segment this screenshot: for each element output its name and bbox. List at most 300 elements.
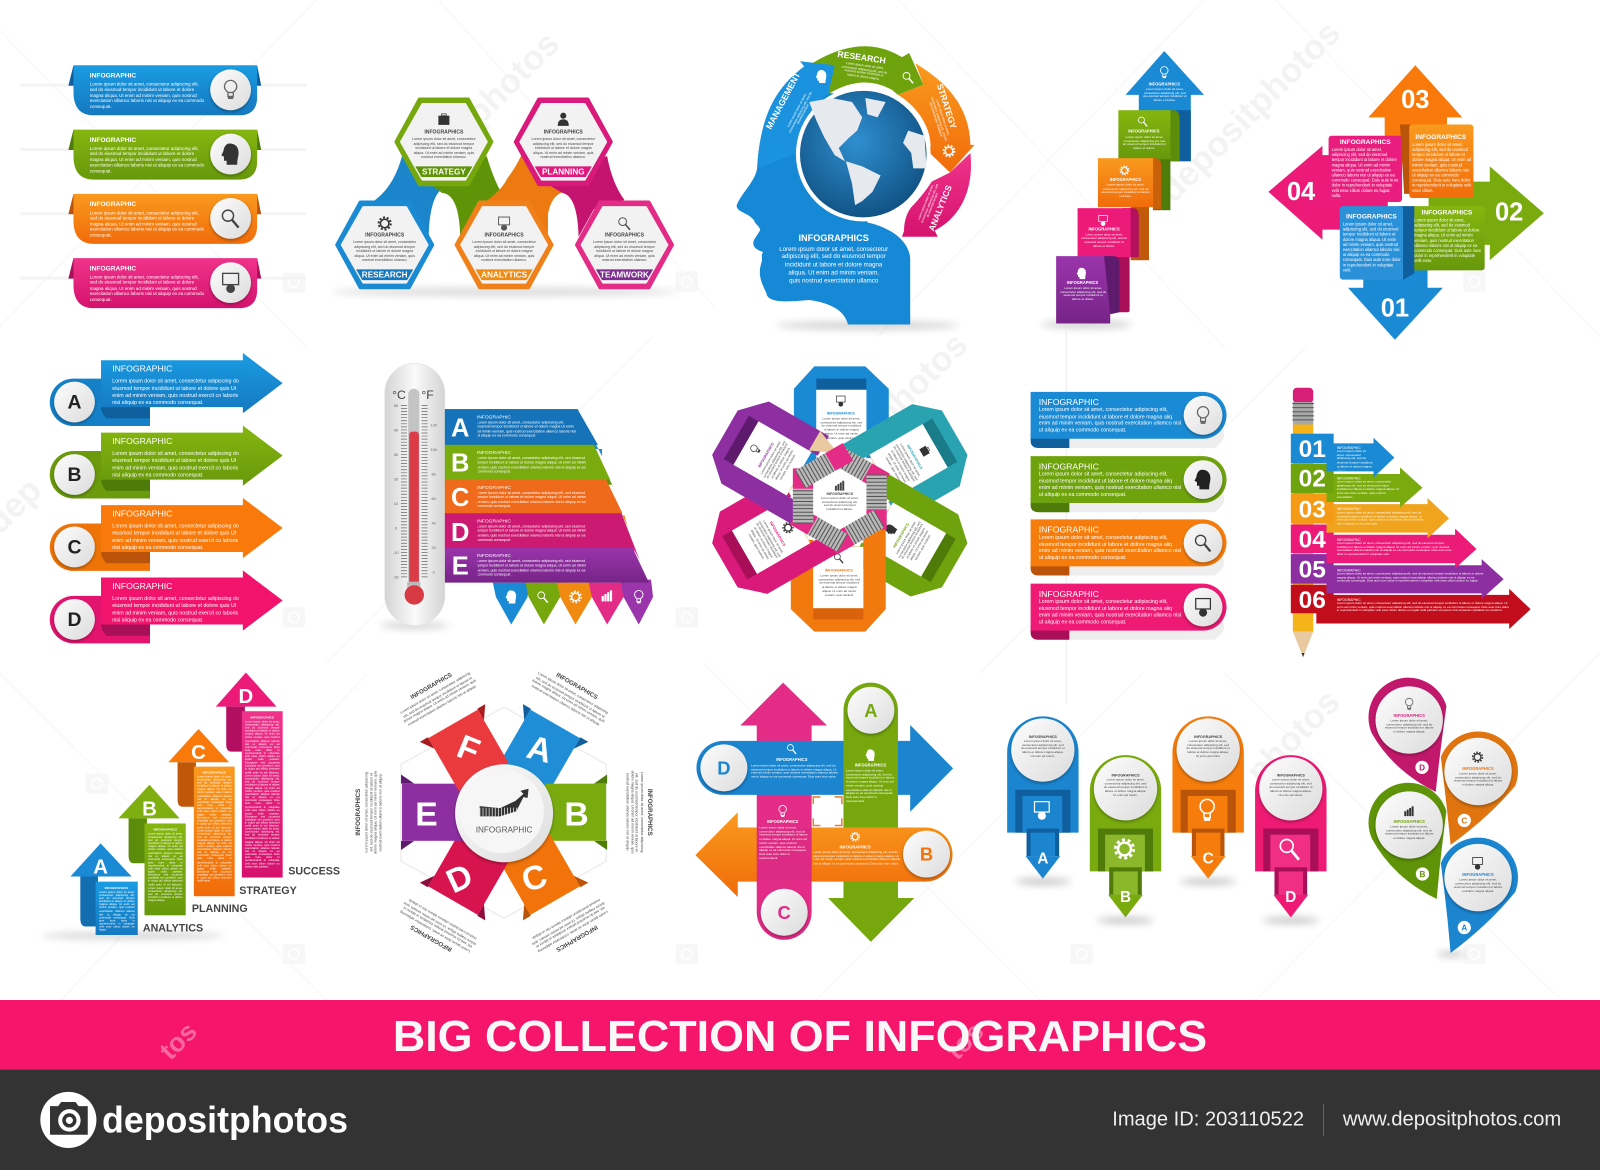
drop C (1441, 731, 1518, 845)
outer text: A: Lorem ipsum dolor sit amet, consectetur adipiscing elit, sed do eiusmod tempor incididunt ut labore et dolore magna aliqua. Ut enim ad minim veniam, quis nostrud exercitation ullamco laboris nisi ut aliquip. (531, 671, 609, 727)
column B: INFOGRAPHICS (154, 828, 177, 832)
arrow 04 (1268, 146, 1388, 240)
banner: orange (20, 194, 306, 244)
watermark layer: photos (1239, 683, 1348, 791)
arrow 02: 02 (1495, 198, 1523, 226)
petal: teal (835, 393, 979, 531)
arrow 01: INFOGRAPHIC (1337, 446, 1361, 450)
card: blue: Lorem ipsum dolor sit amet, adipiscing elit, sed do eiusmod tempor incididunt ut labore et dolore magna aliqua. Ut enim ad minim veniam, quis nostrud exercitation ullamco laboris nisi ut aliquip ex ea commodo consequat. Duis aute irure dolor in reprehenderit in voluptate velit. (1343, 221, 1401, 272)
arrow 01: 01 (1381, 294, 1409, 322)
petal: green: INFOGRAPHICS (892, 522, 910, 549)
ribbon C: Lorem ipsum dolor sit amet, consectetur adipiscing elit, sed eiusmod tempor incididunt ut labore et dolore magna aliqua. Ut enim ad minim veniam, quis nostrud exercitation ullamco laboris nisi ut aliquip ex ea commodo consequat. (477, 490, 586, 508)
drop C: C (1461, 816, 1467, 825)
centre hexagon (813, 468, 866, 530)
banner: blue: Lorem ipsum dolor sit amet, consectetur adipiscing elit, sed do eiusmod tempor incididunt ut labore et dolore magna aliqua. Ut enim ad minim veniam, quis nostrud exercitation ullamco laboris nisi ut aliquip ex ea commodo consequat. (90, 81, 204, 109)
column C: C (191, 742, 206, 764)
banner: orange: Lorem ipsum dolor sit amet, consectetur adipiscing elit, sed do eiusmod tempor incididunt ut labore et dolore magna aliqua. Ut enim ad minim veniam, quis nostrud exercitation ullamco laboris nisi ut aliquip ex ea commodo consequat. (90, 210, 204, 238)
arrow D: D (67, 609, 81, 631)
thermometer: -20 (393, 575, 399, 580)
banner: blue: INFOGRAPHIC (90, 73, 136, 80)
arrow D: INFOGRAPHIC (112, 581, 172, 591)
drop B (1368, 783, 1446, 899)
centre hexagon: INFOGRAPHICS (827, 492, 854, 496)
ribbon B: INFOGRAPHIC (477, 450, 511, 456)
label: blue (1031, 392, 1227, 448)
hexagon: teamwork: TEAMWORK (600, 271, 649, 280)
centre disc: INFOGRAPHIC (476, 826, 533, 835)
thermometer: 80 (432, 472, 436, 477)
outer text: C (522, 885, 616, 963)
scroll: orange (1098, 158, 1161, 260)
drop B: B (1420, 870, 1426, 879)
step labels: SUCCESS (288, 865, 340, 877)
thermometer: 40 (394, 428, 398, 433)
thermometer: 30 (394, 452, 398, 457)
arrow: management: MANAGEMENT (764, 70, 803, 131)
ribbon A: Lorem ipsum dolor sit amet, consectetur adipiscing elit, eiusmod tempor incididunt ut labore et dolore magna Ut enim ad minim veniam, quis nostrud exercitation ullamco laboris nisi ut aliquip ex ea commodo consequat. (477, 420, 576, 438)
petal: green: Lorem ipsum dolor sit amet, consectetur adipiscing elit, sed do eiusmod tempor incididunt ut labore et dolore magna aliqua. Ut enim ad minim veniam, quis nostrud. (895, 520, 931, 561)
arrow: strategy: STRATEGY (935, 83, 959, 130)
hexagon: teamwork: Lorem ipsum dolor sit amet, consectetur adipiscing elit, sed do eiusmod tempor incididunt ut labore et dolore magna aliqua. Ut enim ad minim veniam, quis nostrud exercitation ullamco. (593, 240, 656, 263)
title band (0, 1000, 1600, 1069)
pencil (1293, 388, 1313, 657)
column D: Lorem ipsum dolor sit amet, consectetur adipiscing elit, sed do eiusmod tempor incididunt ut labore et dolore magna aliqua. Ut enim ad minim veniam, quis nostrud exercitation ullamco laboris nisi ut aliquip ex ea commodo consequat. Duis aute irure dolor in reprehenderit in voluptate velit esse cillum dolore eu fugiat nulla pariatur. Excepteur sint occaecat cupidatat non proident, sunt in culpa qui officia deserunt mollit anim id est laborum. Lorem ipsum dolor sit amet, consectetur adipiscing elit, sed do eiusmod tempor incididunt ut labore et dolore magna aliqua. Ut enim ad minim veniam, quis nostrud exercitation ullamco laboris nisi ut aliquip ex ea commodo consequat. Duis aute irure dolor in reprehenderit in voluptate velit esse cillum dolore eu fugiat nulla pariatur. Excepteur sint occaecat cupidatat non proident, sunt in culpa qui officia deserunt mollit anim id est laborum. Lorem ipsum dolor sit amet, consectetur adipiscing elit, sed do eiusmod tempor incididunt ut labore et dolore magna aliqua. Ut enim ad minim veniam, quis nostrud exercitation ullamco laboris nisi ut aliquip ex ea commodo consequat. Duis aute irure dolor in reprehenderit in voluptate velit esse cillum dolore eu fugiat nulla pariatur. (245, 720, 280, 869)
panel: lettered arrows (50, 353, 283, 643)
hexagon: research: RESEARCH (362, 271, 408, 280)
pin C: INFOGRAPHICS (1194, 735, 1223, 739)
title band: tos (940, 1016, 990, 1065)
pin C: C (1203, 850, 1214, 867)
arrow: strategy (898, 63, 974, 172)
ribbon E: INFOGRAPHIC (477, 553, 511, 559)
ribbon A (445, 409, 602, 456)
panel: rounded labels (1031, 392, 1227, 640)
badge C: C (778, 902, 791, 923)
arrow: analytics (902, 153, 971, 237)
arrow 04 (1291, 524, 1477, 568)
badge B (903, 831, 950, 878)
arrow 04: INFOGRAPHIC (1337, 538, 1361, 542)
arrow 06: 06 (1299, 587, 1326, 614)
globe (796, 87, 931, 221)
arrow 02 (1291, 464, 1422, 508)
thermometer: °F (421, 388, 434, 402)
logo (40, 1092, 348, 1148)
website: www.depositphotos.com (1342, 1109, 1561, 1131)
arrow 01: 01 (1299, 436, 1326, 463)
ribbon D: INFOGRAPHIC (477, 518, 511, 524)
hexagon: analytics: Lorem ipsum dolor sit amet, consectetur adipiscing elit, sed do eiusmod tempor incididunt ut labore et dolore magna aliqua. Ut enim ad minim veniam, quis nostrud exercitation ullamco. (472, 240, 536, 263)
column B (118, 785, 186, 915)
badge C (761, 889, 808, 936)
hexagon: analytics: INFOGRAPHICS (485, 233, 524, 239)
pin B: B (1120, 889, 1131, 906)
step labels: PLANNING (192, 903, 248, 915)
centre corner marks (813, 797, 842, 826)
petal: pink: INFOGRAPHICS (769, 521, 786, 547)
thermometer: 40 (432, 520, 436, 525)
ribbon D: Lorem ipsum dolor sit amet, consectetur adipiscing elit, sed eiusmod tempor incididunt ut labore et dolore magna aliqua. Ut enim ad minim veniam, quis nostrud exercitation ullamco laboris nisi ut aliquip ex ea commodo consequat. (477, 524, 586, 542)
pins (493, 580, 653, 624)
outer text: F: INFOGRAPHICS (409, 672, 453, 701)
outer text: F: Lorem ipsum dolor sit amet, consectetur adipiscing elit, sed do eiusmod tempor incididunt ut labore et dolore magna aliqua. Ut enim ad minim veniam, quis nostrud exercitation ullamco laboris nisi ut aliquip. (399, 671, 477, 727)
column A: A (93, 856, 108, 878)
panel: scroll staircase arrow (1041, 51, 1204, 329)
ribbon letters: B (564, 797, 589, 834)
outer text: E (355, 769, 395, 855)
card: orange: INFOGRAPHICS (1415, 134, 1467, 141)
hexagon: research: INFOGRAPHICS (365, 233, 405, 239)
hexagon: research (337, 202, 433, 288)
column D: D (239, 686, 253, 708)
arrow: management (757, 61, 835, 168)
text green (846, 749, 896, 816)
arrow: blue top (1126, 51, 1204, 161)
column C (168, 729, 235, 896)
thermometer: 0 (395, 526, 397, 531)
arrow 02: INFOGRAPHIC (1337, 477, 1361, 481)
petal: purple: INFOGRAPHICS (757, 442, 775, 468)
text green: Lorem ipsum dolor sit amet, consectetur adipiscing elit, sed do eiusmod tempor incididunt ut labore et dolore magna aliqua. Ut enim ad minim veniam, quis nostrud exercitation ullamco laboris nisi ut aliquip ex ea commodo consequat. Duis aute irure dolor in reprehenderit. (846, 769, 894, 803)
thermometer: 100 (430, 447, 437, 452)
label: orange: Lorem ipsum dolor sit amet, consectetur adipiscing elit, eiusmod tempor incididunt ut labore et dolore magna aliq enim ad minim veniam, quis nostrud exercitation ullamco nisi ut aliquip ex ea commodo consequat. (1039, 535, 1181, 561)
arrow A green vertical (828, 683, 914, 942)
outer text: C: INFOGRAPHICS (555, 923, 599, 953)
arrow: analytics: ANALYTICS (926, 183, 954, 233)
thermometer: 50 (394, 403, 398, 408)
drop B: INFOGRAPHICS (1394, 819, 1425, 824)
outer text: B (613, 769, 653, 855)
ribbon B (545, 774, 607, 850)
hexagon: planning: Lorem ipsum dolor sit amet, consectetur adipiscing elit, sed do eiusmod tempor incididunt ut labore et dolore magna aliqua. Ut enim ad minim veniam, quis nostrud exercitation ullamco. (532, 137, 595, 160)
arrow: strategy: Lorem ipsum dolor sit amet, consectetur adipiscing elit, sed do eiusmod tempor incididunt. (928, 96, 951, 141)
ribbon D: D (451, 519, 469, 547)
text pink (759, 805, 809, 871)
head text: incididunt ut labore et dolore magna (785, 262, 882, 269)
panel: four directional arrows (1268, 65, 1544, 340)
head text: INFOGRAPHICS (799, 233, 869, 243)
petal: orange (791, 519, 886, 632)
card: pink: INFOGRAPHICS (1340, 139, 1391, 146)
outer text: E: INFOGRAPHICS (355, 789, 362, 836)
text green: INFOGRAPHICS (855, 762, 886, 767)
label: blue: Lorem ipsum dolor sit amet, consectetur adipiscing elit, eiusmod tempor incididunt ut labore et dolore magna aliq enim ad minim veniam, quis nostrud exercitation ullamco nisi ut aliquip ex ea commodo consequat. (1039, 407, 1181, 433)
outer text: E: Lorem ipsum dolor sit amet, consectetur adipiscing elit, sed do eiusmod tempor incididunt ut labore et dolore magna aliqua. Ut enim ad minim veniam, quis nostrud exercitation ullamco laboris nisi ut aliquip. (364, 771, 382, 854)
ribbon C: INFOGRAPHIC (477, 485, 511, 491)
label: pink: Lorem ipsum dolor sit amet, consectetur adipiscing elit, eiusmod tempor incididunt ut labore et dolore magna aliq enim ad minim veniam, quis nostrud exercitation ullamco nisi ut aliquip ex ea commodo consequat. (1039, 599, 1181, 625)
drop D (1368, 678, 1446, 792)
ribbon letters: C (517, 857, 552, 900)
outer text: D: Lorem ipsum dolor sit amet, consectetur adipiscing elit, sed do eiusmod tempor incididunt ut labore et dolore magna aliqua. Ut enim ad minim veniam, quis nostrud exercitation ullamco laboris nisi ut aliquip. (399, 898, 477, 953)
hexagon: analytics: ANALYTICS (481, 271, 528, 280)
step labels: ANALYTICS (143, 923, 203, 935)
ribbon C (445, 480, 628, 527)
arrow 03 (1291, 494, 1449, 538)
centre disc (455, 764, 553, 862)
arrow C pink vertical (740, 683, 827, 940)
ribbon E (401, 774, 463, 850)
outer text: A: INFOGRAPHICS (555, 672, 599, 701)
badge D: D (717, 757, 731, 778)
arrow 01 (1348, 245, 1443, 340)
ribbon letters: A (523, 729, 556, 771)
drop A: INFOGRAPHICS (1462, 872, 1494, 877)
panel: hexagonal ribbon wheel (355, 662, 653, 963)
column A: Lorem ipsum dolor sit amet, consectetur adipiscing elit, sed do eiusmod tempor incididunt ut labore et dolore magna aliqua. Ut enim ad minim veniam, quis nostrud exercitation ullamco laboris nisi ut aliquip ex ea commodo consequat. Duis aute irure dolor in reprehenderit in voluptate velit esse cillum dolore eu fugiat. (99, 891, 135, 932)
logo: depositphotos (102, 1100, 348, 1141)
outer text: C: Lorem ipsum dolor sit amet, consectetur adipiscing elit, sed do eiusmod tempor incididunt ut labore et dolore magna aliqua. Ut enim ad minim veniam, quis nostrud exercitation ullamco laboris nisi ut aliquip. (531, 898, 609, 953)
connectors between hexagons (370, 153, 624, 243)
drop A (1437, 838, 1518, 956)
drop D: D (1419, 763, 1425, 772)
badge D (700, 744, 747, 791)
column B: B (142, 798, 157, 820)
ribbon letters: D (441, 857, 479, 901)
column C: Lorem ipsum dolor sit amet, consectetur adipiscing elit, sed do eiusmod tempor incididunt ut labore et dolore magna aliqua. Ut enim ad minim veniam, quis nostrud exercitation ullamco laboris nisi ut aliquip ex ea commodo consequat. Duis aute irure dolor in reprehenderit in voluptate velit esse cillum dolore eu fugiat nulla pariatur. Excepteur sint occaecat cupidatat non proident, sunt in culpa qui officia deserunt mollit anim id est laborum. Lorem ipsum dolor sit amet, consectetur adipiscing elit, sed do eiusmod tempor incididunt ut labore et dolore magna aliqua. Ut enim ad minim veniam, quis nostrud exercitation ullamco laboris nisi ut aliquip ex ea commodo consequat. Duis aute irure dolor in reprehenderit in voluptate velit esse cillum dolore eu fugiat nulla pariatur. Excepteur sint occaecat cupidatat non proident, sunt in culpa qui officia deserunt mollit anim. (197, 776, 232, 883)
petal: purple: Lorem ipsum dolor sit amet, consectetur adipiscing elit, sed do eiusmod tempor incididunt ut labore et dolore magna aliqua. Ut enim ad minim veniam, quis nostrud. (760, 440, 796, 481)
thermometer: 20 (394, 477, 398, 482)
arrow A: INFOGRAPHIC (112, 363, 172, 373)
arrow C: C (67, 537, 81, 559)
arrow D (50, 570, 283, 643)
arrow C: INFOGRAPHIC (112, 508, 172, 518)
ribbon A: A (451, 415, 469, 443)
panel: head and globe (737, 46, 974, 330)
label: pink (1031, 584, 1227, 640)
ribbon E (445, 548, 649, 583)
petal: teal: Lorem ipsum dolor sit amet, consectetur adipiscing elit, sed do eiusmod tempor incididunt ut labore et dolore magna aliqua. Ut enim ad minim veniam, quis nostrud. (885, 443, 922, 483)
hexagon: planning (515, 99, 611, 185)
card: orange (1400, 124, 1473, 198)
ribbon letters: F (452, 728, 485, 770)
arrow 06 (1291, 585, 1531, 629)
card: pink (1329, 136, 1402, 202)
petal: blue: INFOGRAPHICS (827, 411, 855, 415)
arrow B: INFOGRAPHIC (112, 436, 172, 446)
arrow B: B (67, 464, 81, 486)
banner: pink (20, 258, 306, 308)
panel: stacked banners (20, 65, 306, 308)
column B: Lorem ipsum dolor sit amet, consectetur adipiscing elit, sed do eiusmod tempor incididunt ut labore et dolore magna aliqua. Ut enim ad minim veniam, quis nostrud exercitation ullamco laboris nisi ut aliquip ex ea commodo consequat. Duis aute irure dolor in reprehenderit in voluptate velit esse cillum dolore eu fugiat nulla pariatur. Excepteur sint occaecat cupidatat non proident, sunt in culpa qui officia deserunt mollit anim id est laborum. Lorem ipsum dolor sit amet, consectetur adipiscing elit, sed do eiusmod tempor incididunt ut labore et dolore magna aliqua. (148, 833, 183, 902)
petal: pink: Lorem ipsum dolor sit amet, consectetur adipiscing elit, sed do eiusmod tempor incididunt ut labore et dolore magna aliqua. Ut enim ad minim veniam, quis nostrud. (748, 519, 784, 560)
arrow A: Lorem ipsum dolor sit amet, consectetur adipiscing do eiusmod tempor incididunt ut labore et dolore quis Ut enim ad minim veniam, quis nostrud exercit co laboris nisi aliquip ex ea commodo consequat. (112, 379, 239, 406)
petal: green (833, 469, 978, 608)
column D (216, 672, 283, 878)
column A: INFOGRAPHICS (105, 886, 128, 890)
arrow 05: 05 (1299, 557, 1326, 584)
hexagon: strategy (396, 99, 492, 185)
pin B: INFOGRAPHICS (1111, 774, 1140, 778)
ribbon C: C (451, 484, 469, 512)
card: green: INFOGRAPHICS (1422, 209, 1473, 216)
pencil ferrule ring (790, 443, 890, 555)
arrow: analytics: Lorem ipsum dolor sit amet, consectetur adipiscing elit, sed do eiusmod tempor. (917, 183, 940, 224)
arrow: blue top: INFOGRAPHICS (1149, 82, 1180, 87)
arrow 03: 03 (1401, 86, 1429, 114)
outer text: B: Lorem ipsum dolor sit amet, consectetur adipiscing elit, sed do eiusmod tempor incididunt ut labore et dolore magna aliqua. Ut enim ad minim veniam, quis nostrud exercitation ullamco laboris nisi ut aliquip. (626, 771, 644, 854)
hexagon: teamwork (577, 202, 672, 288)
badge A (847, 687, 894, 734)
ribbon A (492, 704, 588, 796)
ribbon D (420, 829, 516, 920)
card: blue (1340, 206, 1414, 280)
label: green (1031, 456, 1227, 512)
ribbon C (492, 829, 588, 920)
arrow: management: Lorem ipsum dolor sit amet, consectetur adipiscing elit, sed do eiusmod tempor. (786, 91, 813, 133)
arrow A: A (67, 392, 81, 414)
hexagon: analytics (456, 202, 552, 288)
scroll: green: INFOGRAPHICS (1128, 129, 1160, 134)
card: green (1410, 206, 1485, 270)
ribbon E: E (452, 552, 469, 580)
drop A: A (1461, 924, 1467, 933)
ribbon E: Lorem ipsum dolor sit amet, consectetur adipiscing elit, sed eiusmod tempor incididunt ut labore et dolore magna aliqua. Ut enim ad minim veniam, quis nostrud exercitation ullamco laboris nisi ut aliquip ex ea commodo consequat. (477, 559, 586, 577)
watermark layer: depositphotos (1152, 14, 1348, 210)
hexagon: planning: PLANNING (542, 167, 585, 176)
card: orange: Lorem ipsum dolor sit amet, adipiscing elit, sed do eiusmod tempor incididunt ut labore et dolore magna aliqua. Ut enim ad minim veniam, quis nostrud exercitation ullamco laboris nisi ut aliquip ex ea commodo consequat. Duis aute irure dolor in reprehenderit in voluptate velit esse cillum. (1412, 142, 1471, 193)
text blue (751, 745, 841, 789)
pin D: D (1285, 889, 1296, 906)
text pink: Lorem ipsum dolor sit amet, consectetur adipiscing elit, sed do eiusmod tempor incididunt ut labore et dolore magna aliqua. Ut enim ad minim veniam, quis nostrud exercitation ullamco laboris nisi ut aliquip ex ea commodo consequat. Duis aute irure dolor in reprehenderit. (759, 827, 808, 860)
outer text: D (393, 885, 487, 963)
pin D (1255, 755, 1327, 923)
arrow C (50, 498, 283, 571)
label: orange (1031, 519, 1227, 576)
thermometer: °C (392, 388, 406, 402)
label: blue: INFOGRAPHIC (1039, 397, 1099, 407)
watermark layer: photos (867, 326, 975, 434)
arrow C: Lorem ipsum dolor sit amet, consectetur adipiscing do eiusmod tempor incididunt ut labore et dolore quis Ut enim ad minim veniam, quis nostrud exercit co laboris nisi aliquip ex ea commodo consequat. (112, 523, 239, 551)
arrow B orange horizontal (695, 812, 953, 897)
column A (70, 843, 138, 935)
card: blue: INFOGRAPHICS (1346, 213, 1397, 220)
card: green: Lorem ipsum dolor sit amet, adipiscing elit, sed do eiusmod tempor incididunt ut labore et dolore magna aliqua. Ut enim ad minim veniam, quis nostrud exercitation ullamco laboris nisi ut aliquip ex ea commodo consequat. Duis aute irure dolor in reprehenderit in voluptate velit esse. (1414, 217, 1481, 263)
head text: quis nostrud exercitation ullamco (789, 278, 878, 285)
banner: green: INFOGRAPHIC (90, 137, 136, 144)
thermometer: 0 (433, 569, 435, 574)
label: orange: INFOGRAPHIC (1039, 525, 1099, 535)
arrow: research: Lorem ipsum dolor sit amet, consectetur adipiscing elit, sed do eiusmod tempor incididunt ut labore et dolore magna. (841, 61, 887, 81)
drop C: INFOGRAPHICS (1462, 766, 1494, 771)
panel: hexagon chain (332, 99, 679, 296)
arrow 04: 04 (1287, 178, 1316, 206)
hexagon: strategy: STRATEGY (422, 167, 466, 176)
label: green: Lorem ipsum dolor sit amet, consectetur adipiscing elit, eiusmod tempor incididunt ut labore et dolore magna aliq enim ad minim veniam, quis nostrud exercitation ullamco nisi ut aliquip ex ea commodo consequat. (1039, 471, 1181, 497)
petal: pink (700, 467, 845, 605)
hexagon: teamwork: INFOGRAPHICS (605, 233, 645, 239)
ribbon B: B (451, 449, 469, 477)
ribbon B: Lorem ipsum dolor sit amet, consectetur adipiscing elit, sed eiusmod tempor incididunt ut labore et dolore magna aliqua. Ut enim ad minim veniam, quis nostrud exercitation ullamco laboris nisi ut aliquip ex ea commodo consequat. (477, 456, 586, 474)
arrow 04: 04 (1299, 526, 1326, 553)
pin A (1007, 716, 1079, 885)
panel: map-drop pins (1368, 678, 1518, 956)
arrow A (50, 353, 283, 426)
panel: stepped growth arrows (41, 672, 340, 939)
step labels (143, 865, 340, 935)
petal: teal: INFOGRAPHICS (906, 444, 924, 471)
banner: pink: INFOGRAPHIC (90, 265, 136, 272)
banner: orange: INFOGRAPHIC (90, 201, 136, 208)
petal: orange: INFOGRAPHICS (825, 568, 853, 572)
thermometer (385, 363, 445, 626)
watermark layer: photos (458, 25, 567, 133)
badge A: A (864, 700, 878, 721)
thermometer: 120 (430, 423, 437, 428)
card: pink: Lorem ipsum dolor sit amet, adipiscing elit, sed do eiusmod tempor incididunt ut labore et dolore magna aliqua. Ut enim ad minim veniam, quis nostrud exercitation ullamco laboris nisi ut aliquip ex ea commodo consequat. Duis aute irure dolor in reprehenderit in voluptate velit esse cillum dolore eu fugiat nulla. (1332, 147, 1398, 198)
head text: aliqua. Ut enim ad minim veniam, (788, 270, 879, 277)
banner: green (20, 130, 306, 180)
label: pink: INFOGRAPHIC (1039, 589, 1099, 599)
outer text: F (393, 662, 487, 739)
ribbon D (445, 513, 640, 560)
petal: purple (702, 390, 847, 529)
panel: pencil with numbered arrows (1291, 388, 1531, 657)
arrow B: Lorem ipsum dolor sit amet, consectetur adipiscing do eiusmod tempor incididunt ut labore et dolore quis Ut enim ad minim veniam, quis nostrud exercit co laboris nisi aliquip ex ea commodo consequat. (112, 451, 239, 479)
panel: pencil flower (700, 366, 979, 632)
panel: woven cross arrows (695, 683, 953, 942)
column C: INFOGRAPHICS (203, 770, 226, 774)
arrow: research (812, 46, 923, 95)
head silhouette (737, 66, 910, 324)
arrow B (50, 426, 283, 498)
arrow 06: INFOGRAPHIC (1337, 598, 1361, 602)
label: green: INFOGRAPHIC (1039, 461, 1099, 471)
pin B (1090, 755, 1161, 923)
arrow 02: 02 (1299, 466, 1326, 493)
arrow 05 (1291, 554, 1504, 599)
title band: BIG COLLECTION OF INFOGRAPHICS (393, 1012, 1207, 1061)
text blue: INFOGRAPHICS (776, 757, 808, 762)
banner: blue (20, 65, 306, 115)
ribbon letters: E (415, 797, 438, 834)
scroll: purple: INFOGRAPHICS (1067, 280, 1099, 285)
hexagon: strategy: INFOGRAPHICS (424, 130, 464, 136)
arrow: research: RESEARCH (837, 49, 886, 66)
ribbon letters (415, 728, 589, 901)
pin A: A (1037, 850, 1048, 867)
pin A: INFOGRAPHICS (1029, 735, 1057, 739)
pin C (1172, 716, 1244, 885)
thermometer: -10 (393, 550, 399, 555)
arrow D: Lorem ipsum dolor sit amet, consectetur adipiscing do eiusmod tempor incididunt ut labore et dolore quis Ut enim ad minim veniam, quis nostrud exercit co laboris nisi aliquip ex ea commodo consequat. (112, 596, 239, 623)
step labels: STRATEGY (239, 885, 297, 897)
banner: pink: Lorem ipsum dolor sit amet, consectetur adipiscing elit, sed do eiusmod tempor incididunt ut labore et dolore magna aliqua. Ut enim ad minim veniam, quis nostrud exercitation ullamco laboris nisi ut aliquip ex ea commodo consequat. (90, 274, 204, 302)
thermometer: 10 (394, 501, 398, 506)
arrow 03: 03 (1299, 496, 1326, 523)
panel: thermometer with ribbons (380, 363, 653, 629)
panel: tab pins (1007, 716, 1327, 923)
scroll: green (1118, 110, 1180, 210)
pin D: INFOGRAPHICS (1277, 774, 1305, 778)
text orange: INFOGRAPHICS (839, 844, 871, 849)
title band: tos (153, 1016, 203, 1065)
image id: Image ID: 203110522 (1112, 1109, 1304, 1131)
column D: INFOGRAPHICS (251, 715, 274, 719)
ribbon A: INFOGRAPHIC (477, 414, 511, 420)
head text: Lorem ipsum dolor sit amet, consectetur (779, 246, 888, 253)
ribbon F (420, 704, 516, 796)
thermometer: 60 (432, 496, 436, 501)
text pink: INFOGRAPHICS (767, 819, 799, 824)
footer bar (0, 1069, 1600, 1170)
scroll: purple (1056, 256, 1119, 323)
head text: adipiscing elit, sed do eiusmod tempor (782, 254, 886, 261)
ribbon B (445, 445, 615, 492)
head text (772, 233, 895, 291)
arrow 05: INFOGRAPHIC (1337, 568, 1361, 572)
banner: green: Lorem ipsum dolor sit amet, consectetur adipiscing elit, sed do eiusmod tempor incididunt ut labore et dolore magna aliqua. Ut enim ad minim veniam, quis nostrud exercitation ullamco laboris nisi ut aliquip ex ea commodo consequat. (90, 145, 204, 174)
hexagon: research: Lorem ipsum dolor sit amet, consectetur adipiscing elit, sed do eiusmod tempor incididunt ut labore et dolore magna aliqua. Ut enim ad minim veniam, quis nostrud exercitation ullamco. (353, 240, 416, 263)
